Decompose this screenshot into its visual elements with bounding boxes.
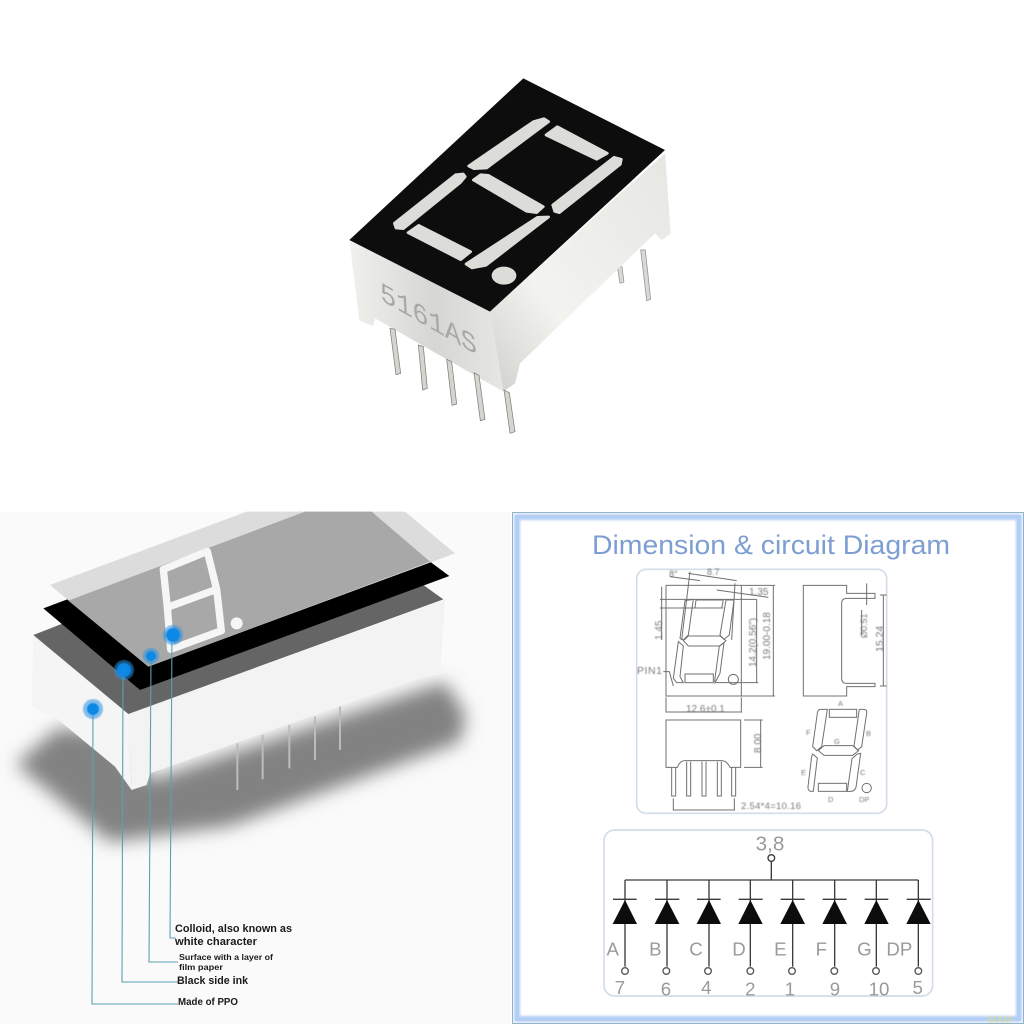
dimension labels: 8.00 [753, 733, 764, 753]
segment and pin labels: C [689, 938, 703, 959]
callout labels: Colloid, also known as [175, 923, 292, 935]
dimension labels: 19.00-0.18 [762, 612, 773, 660]
front pins [390, 328, 515, 433]
black top face [349, 78, 665, 312]
device body [32, 635, 132, 790]
dimension labels: D [828, 795, 834, 804]
pins [237, 707, 340, 790]
back pins [617, 250, 651, 301]
common anode bus [613, 855, 931, 967]
callout labels: Made of PPO [178, 997, 238, 1008]
callout labels: Surface with a layer of [179, 952, 273, 962]
panel: dimension and circuit diagram [512, 512, 1024, 1024]
bottom view [666, 720, 763, 811]
decimal point [231, 617, 243, 629]
dimension labels: Ø0.51 [859, 613, 869, 638]
segment and pin labels: G [857, 938, 872, 959]
dimension labels: 8° [669, 569, 678, 579]
title: Dimension & circuit Diagram [592, 530, 950, 560]
segment and pin labels: 3,8 [756, 833, 784, 856]
dimension labels: DP [859, 795, 869, 804]
dimension labels: 1.35 [749, 587, 769, 598]
dimension labels: E [801, 768, 806, 777]
segment and pin labels: A [606, 938, 619, 959]
callout labels: white character [174, 936, 258, 948]
dimension labels: 15.24 [874, 626, 886, 652]
dimension labels: 1.45 [654, 620, 665, 640]
dimension drawing [637, 569, 887, 813]
grey window [68, 512, 430, 667]
diodes [613, 900, 931, 924]
dimension labels: C [860, 768, 866, 777]
dimension labels: 14.2(0.56") [748, 618, 759, 667]
translucent film layer [50, 512, 455, 667]
blue frame [512, 512, 1024, 1024]
dimension labels: A [838, 699, 843, 708]
dimension labels: B [866, 729, 871, 738]
dimension labels: G [834, 737, 840, 746]
dimension labels: 12.6±0.1 [686, 704, 725, 715]
segment and pin labels: 6 [661, 978, 671, 999]
callout labels: Black side ink [177, 975, 249, 987]
segment and pin labels: 4 [701, 977, 712, 998]
dimension labels: F [806, 728, 811, 737]
circuit diagram [604, 830, 933, 999]
dimension labels: 2.54*4=10.16 [741, 801, 801, 812]
segment and pin labels: DP [886, 938, 912, 959]
segment and pin labels: 2 [745, 978, 756, 999]
segment and pin labels: 9 [830, 978, 840, 999]
seven segments [394, 119, 621, 283]
segment key [808, 709, 871, 793]
dark grey layer [33, 585, 443, 714]
callout labels: film paper [179, 962, 224, 972]
right side face [490, 153, 671, 392]
segment and pin labels: 5 [912, 977, 923, 998]
black ink layer [43, 512, 449, 690]
segment and pin labels: E [774, 938, 787, 959]
front view [660, 572, 775, 713]
segment and pin labels: D [732, 938, 746, 959]
segment and pin labels: 7 [615, 977, 625, 998]
segment and pin labels: 10 [869, 978, 889, 999]
panel: product photo of 7-segment display [349, 78, 671, 433]
callout lines [92, 635, 178, 1004]
panel background [0, 512, 511, 1024]
dimension labels: 8.7 [707, 567, 720, 577]
exploded drawing [32, 512, 455, 790]
terminals [622, 968, 922, 974]
segment and pin labels: F [816, 938, 827, 959]
dimension labels: PIN1 [637, 665, 662, 677]
left side face [349, 240, 503, 392]
part number print: 5161AS [379, 278, 478, 364]
side view [803, 583, 887, 696]
white digit [163, 551, 221, 649]
callout labels [174, 923, 292, 1008]
dimension labels [637, 567, 886, 812]
callout dots [83, 625, 183, 719]
segment and pin labels: 1 [785, 978, 795, 999]
segment and pin labels: B [649, 938, 662, 959]
cast shadow [16, 682, 466, 842]
panel: exploded layers illustration [0, 512, 511, 1024]
segment and pin labels [606, 833, 923, 999]
